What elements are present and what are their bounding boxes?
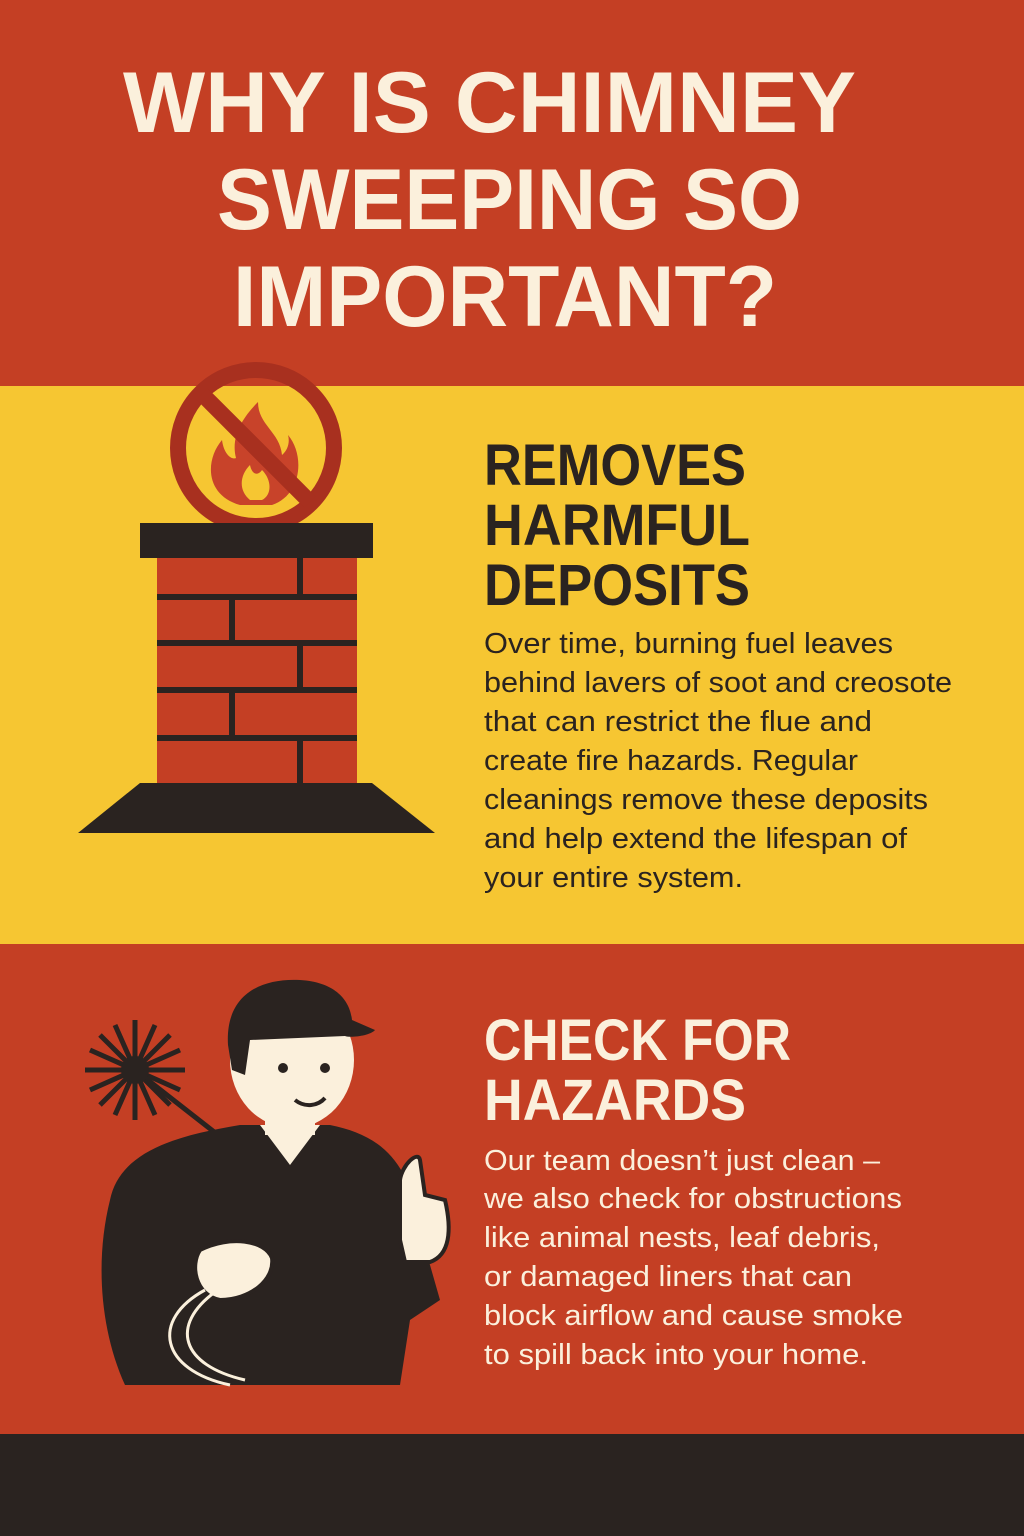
heading: removes harmful deposits <box>484 433 750 618</box>
title <box>123 55 856 345</box>
text block: hazards body: like animal nests, leaf debris, <box>484 1222 880 1254</box>
icon: brick chimney <box>78 523 435 833</box>
text block: deposits body: and help extend the lifespan of <box>484 823 908 855</box>
text block: hazards body: we also check for obstructions <box>483 1183 902 1215</box>
text block: deposits body <box>484 628 952 894</box>
text block: deposits body: behind lavers of soot and creosote <box>484 667 952 699</box>
icon: chimney sweep man <box>85 980 449 1385</box>
heading: check for hazards: HAZARDS <box>484 1068 746 1133</box>
heading: removes harmful deposits: DEPOSITS <box>484 553 750 618</box>
text block: hazards body: block airflow and cause smoke <box>484 1300 903 1332</box>
header panel <box>0 0 1024 386</box>
text block: deposits body: that can restrict the flue and <box>484 706 872 738</box>
text block: hazards body: to spill back into your home. <box>484 1339 868 1371</box>
icon: no fire sign <box>178 370 334 526</box>
footer bar <box>0 1434 1024 1536</box>
title: WHY IS CHIMNEY <box>123 55 856 151</box>
text block: deposits body: your entire system. <box>484 862 743 894</box>
text block: hazards body: Our team doesn’t just clean – <box>484 1145 881 1177</box>
text block: hazards body: or damaged liners that can <box>484 1261 852 1293</box>
text block: deposits body: create fire hazards. Regular <box>484 745 858 777</box>
text block: deposits body: cleanings remove these deposits <box>484 784 928 816</box>
heading: removes harmful deposits: HARMFUL <box>484 493 750 558</box>
title: IMPORTANT? <box>233 249 777 345</box>
heading: check for hazards <box>484 1008 791 1133</box>
heading: check for hazards: CHECK FOR <box>484 1008 791 1073</box>
panel: removes harmful deposits <box>0 370 1024 944</box>
title: SWEEPING SO <box>217 152 802 248</box>
heading: removes harmful deposits: REMOVES <box>484 433 746 498</box>
panel: check for hazards <box>0 944 1024 1434</box>
text block: deposits body: Over time, burning fuel leaves <box>484 628 893 660</box>
text block: hazards body <box>483 1145 903 1371</box>
